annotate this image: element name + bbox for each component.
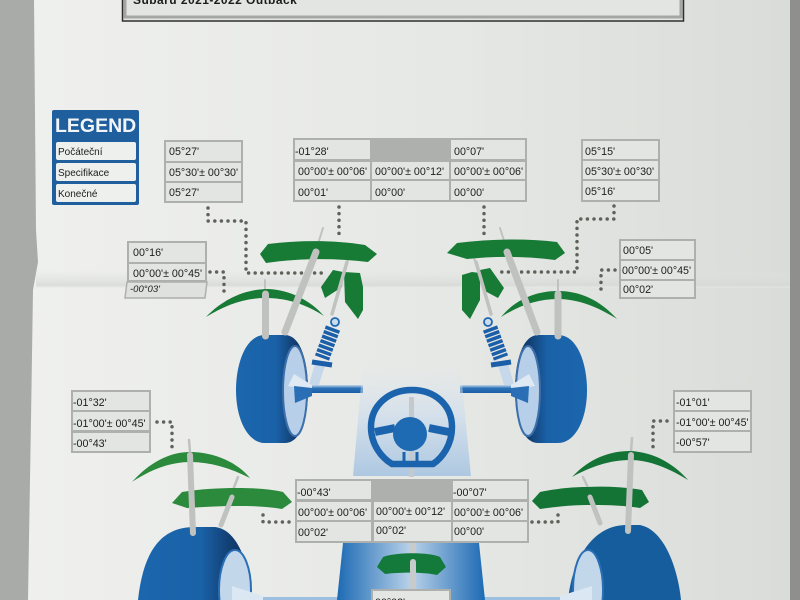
stems (507, 252, 558, 336)
toe arc (447, 239, 565, 260)
header box (122, 0, 684, 21)
table: rear toe: 00°00'± 00°06' (298, 507, 367, 519)
toe arc (532, 487, 649, 509)
table: rear toe: 00°00' (454, 526, 484, 538)
tyre (236, 335, 308, 443)
axle (450, 597, 560, 600)
car body centre (337, 543, 485, 600)
hub (511, 374, 535, 403)
table: rear toe: -00°07' (453, 487, 487, 499)
front left gauges (206, 228, 377, 336)
rim (573, 550, 603, 600)
table: rear toe: 00°00'± 00°12' (376, 506, 445, 518)
table: front right caster: 05°16' (585, 186, 615, 198)
table: front toe: 00°00'± 00°06' (298, 166, 367, 178)
axle (460, 385, 511, 393)
tyre (568, 525, 681, 600)
toe arc (260, 241, 377, 263)
table: rear right camber: -01°00'± 00°45' (676, 417, 749, 429)
table: rear toe: 00°00'± 00°06' (454, 507, 523, 519)
table: front right camber (619, 239, 696, 299)
table: rear right camber (673, 390, 752, 453)
rim (516, 346, 540, 436)
table: front right camber: 00°02' (623, 284, 653, 296)
axle (312, 385, 363, 393)
front left wheel assembly (236, 318, 363, 443)
legend: Počáteční (58, 147, 103, 158)
table: rear left camber: -00°43' (73, 438, 107, 450)
stem tips behind arcs (583, 438, 632, 492)
tyre (138, 527, 252, 600)
camber arc (206, 289, 324, 317)
caster leaves (462, 272, 480, 319)
rear right gauges (532, 438, 688, 531)
table: front toe: 00°00' (375, 187, 405, 199)
table: front left caster: 05°30'± 00°30' (169, 167, 238, 179)
table: front toe: 00°00'± 00°06' (454, 166, 523, 178)
table: rear toe (295, 479, 529, 543)
camber arc (132, 452, 250, 482)
hub (232, 586, 263, 600)
stem tips behind arcs (473, 228, 558, 292)
table: front toe: 00°00' (454, 187, 484, 199)
table: front right caster: 05°15' (585, 146, 615, 158)
table: front toe: 00°00'± 00°12' (375, 166, 444, 178)
table: front left caster: 05°27' (169, 146, 199, 158)
table: rear right camber: -01°01' (676, 397, 710, 409)
shock absorber (308, 318, 339, 388)
dotted connectors (157, 206, 667, 522)
table: front left camber: 00°16' (133, 247, 163, 259)
table: front toe: -01°28' (295, 146, 329, 158)
table: front left caster (164, 140, 243, 203)
table: rear left camber: -01°32' (73, 397, 107, 409)
stem tips behind arcs (189, 440, 238, 490)
table: rear left camber (71, 390, 151, 453)
table: front left camber: 00°00'± 00°45' (133, 268, 202, 280)
shock absorber (484, 318, 515, 388)
toe arc (172, 488, 292, 509)
front right wheel assembly (460, 318, 587, 443)
table: rear right camber: -00°57' (676, 437, 710, 449)
front right gauges (447, 228, 617, 336)
table: front left caster: 05°27' (169, 187, 199, 199)
caster leaves (321, 270, 343, 298)
rear left gauges (132, 440, 292, 533)
table: front left camber: -00°03' (130, 284, 161, 295)
stems (266, 252, 316, 336)
hub (560, 586, 592, 600)
rear right wheel (450, 525, 681, 600)
steering wheel (353, 363, 471, 477)
rim (219, 550, 251, 600)
rim (283, 346, 307, 436)
legend (52, 110, 139, 205)
stems (190, 455, 193, 533)
table: rear left camber: -01°00'± 00°45' (73, 418, 146, 430)
tyre (515, 335, 587, 443)
hub (288, 374, 312, 403)
table: front right caster: 05°30'± 00°30' (585, 166, 654, 178)
legend: Konečné (58, 189, 98, 200)
table: front right camber: 00°05' (623, 245, 653, 257)
rear left wheel (138, 527, 372, 600)
camber arc (501, 291, 617, 319)
table: rear toe: 00°02' (376, 525, 406, 537)
table: rear toe: 00°02' (298, 527, 328, 539)
table: front left camber (125, 241, 207, 298)
stem tips behind arcs (265, 228, 349, 292)
thrust table (372, 590, 450, 600)
table: front right caster (581, 139, 660, 202)
axle (263, 597, 372, 600)
table: front toe: 00°07' (454, 146, 484, 158)
stems (628, 455, 631, 531)
legend: Specifikace (58, 168, 110, 179)
table: rear toe: -00°43' (297, 487, 331, 499)
legend: LEGEND (55, 115, 136, 137)
camber arc (572, 451, 688, 480)
table: front toe: 00°01' (298, 187, 328, 199)
table: front right camber: 00°00'± 00°45' (622, 265, 691, 277)
table: front toe (293, 138, 527, 202)
rear thrust arc (377, 553, 446, 575)
